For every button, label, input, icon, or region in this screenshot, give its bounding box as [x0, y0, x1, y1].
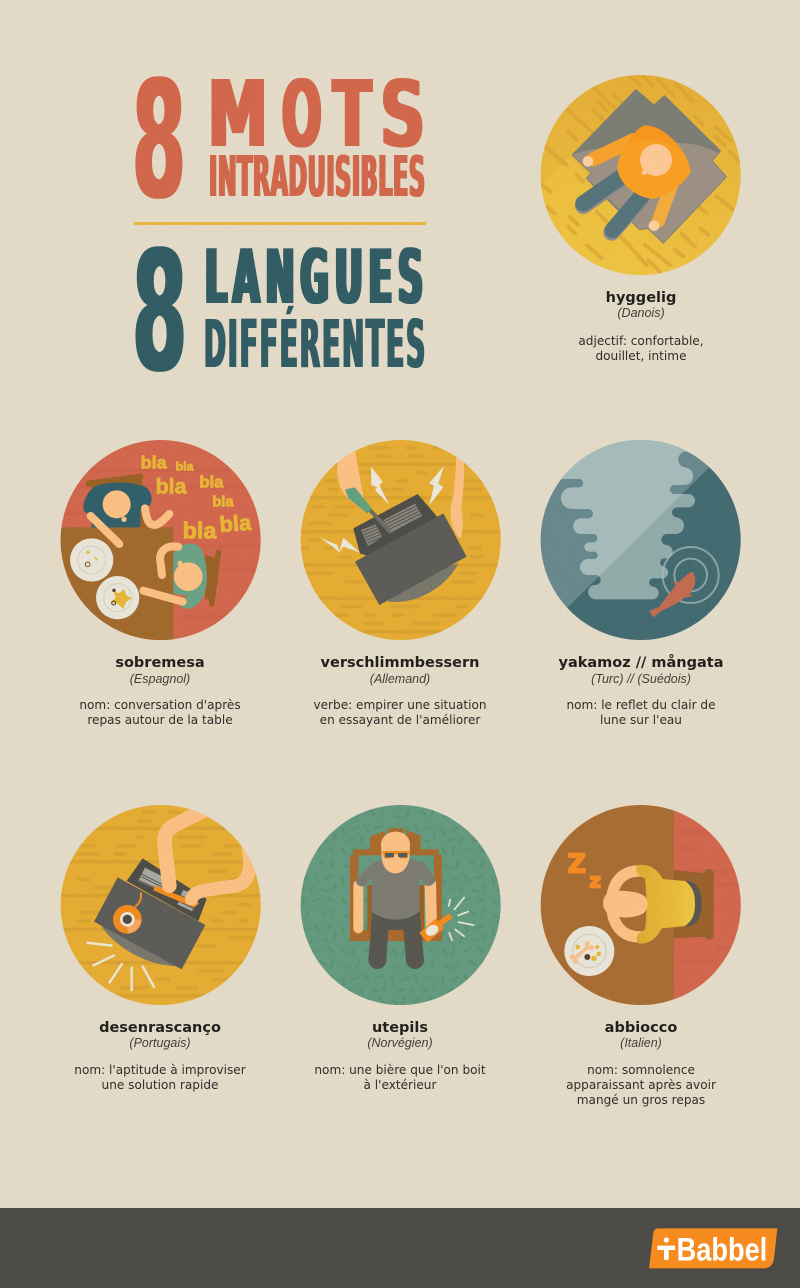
word: utepils: à l'extérieur	[364, 1078, 436, 1092]
logo: Babbel	[649, 1228, 777, 1268]
icon: person sleeping at a table: z	[589, 869, 601, 893]
word: utepils: utepils	[372, 1020, 428, 1036]
word: verschlimmbessern	[313, 655, 487, 727]
heading: 8 langues différentes: LANGUES	[205, 234, 423, 321]
icon: hands fixing a machine with tape	[60, 805, 261, 1005]
word: utepils: nom: une bière que l'on boit	[314, 1063, 486, 1077]
word: yakamoz // mångata: yakamoz // mångata	[559, 654, 723, 671]
word: verschlimmbessern: en essayant de l'améliorer	[320, 713, 480, 727]
icon: people talking at a table: bla	[199, 472, 224, 491]
word: yakamoz // mångata: (Turc) // (Suédois)	[591, 672, 691, 686]
panel: verschlimmbessern	[300, 440, 501, 726]
icon: man with a beer in a deck chair	[300, 805, 501, 1005]
word: abbiocco: (Italien)	[620, 1036, 662, 1050]
logo: Babbel: Babbel	[677, 1231, 767, 1267]
heading: 8 mots intraduisibles: T	[333, 60, 371, 168]
heading: 8 mots intraduisibles: O	[282, 61, 321, 169]
word: sobremesa: nom: conversation d'après	[79, 698, 241, 712]
panel: utepils	[300, 805, 501, 1089]
footer bar	[0, 1208, 800, 1288]
icon: person sleeping at a table	[540, 805, 741, 1005]
heading: 8 mots intraduisibles	[132, 46, 425, 235]
word: desenrascanço: une solution rapide	[102, 1078, 218, 1092]
word: yakamoz // mångata: nom: le reflet du clair de	[566, 698, 716, 712]
word: yakamoz // mångata	[559, 654, 723, 727]
icon: people talking at a table	[60, 440, 261, 640]
word: abbiocco: abbiocco	[605, 1020, 677, 1036]
icon: people talking at a table: bla	[176, 460, 194, 474]
divider	[134, 222, 426, 225]
heading: 8 langues différentes: 8	[132, 215, 187, 409]
word: hyggelig: adjectif: confortable,	[578, 334, 704, 348]
icon: moon reflection on water with fish	[540, 440, 741, 640]
word: hyggelig	[578, 290, 704, 363]
heading: 8 mots intraduisibles: INTRADUISIBLES	[209, 145, 425, 210]
word: abbiocco: mangé un gros repas	[577, 1093, 705, 1107]
word: hyggelig: (Danois)	[617, 306, 665, 320]
word: sobremesa: repas autour de la table	[87, 713, 233, 727]
word: sobremesa: (Espagnol)	[130, 672, 190, 686]
panel: yakamoz // mångata	[540, 440, 741, 724]
word: sobremesa: sobremesa	[115, 655, 205, 671]
icon: person lying on a rug	[540, 75, 741, 275]
word: abbiocco: nom: somnolence	[587, 1063, 695, 1077]
icon: people talking at a table: bla	[141, 452, 168, 472]
word: abbiocco	[566, 1020, 716, 1107]
panel: abbiocco	[540, 805, 741, 1106]
word: verschlimmbessern: (Allemand)	[370, 672, 430, 686]
word: desenrascanço: desenrascanço	[99, 1020, 221, 1036]
word: desenrascanço	[74, 1020, 246, 1092]
word: desenrascanço: nom: l'aptitude à improviser	[74, 1063, 246, 1077]
heading: 8 mots intraduisibles: M	[208, 62, 268, 169]
word: sobremesa	[79, 655, 241, 727]
icon: person sleeping at a table: Z	[567, 849, 586, 879]
word: yakamoz // mångata: lune sur l'eau	[600, 713, 682, 727]
title block	[132, 46, 426, 409]
word: hyggelig: hyggelig	[606, 290, 676, 306]
icon: people talking at a table: bla	[219, 510, 253, 537]
icon: people talking at a table: bla	[183, 517, 217, 543]
word: abbiocco: apparaissant après avoir	[566, 1078, 716, 1092]
word: verschlimmbessern: verschlimmbessern	[321, 655, 479, 671]
panel: sobremesa	[60, 440, 261, 726]
heading: 8 langues différentes	[132, 215, 425, 409]
icon: people talking at a table: bla	[156, 475, 187, 499]
icon: screwdriver poking a broken machine	[300, 440, 501, 640]
word: hyggelig: douillet, intime	[595, 349, 687, 363]
word: utepils: (Norvégien)	[367, 1036, 433, 1050]
icon: people talking at a table: bla	[212, 495, 234, 511]
heading: 8 mots intraduisibles: S	[380, 61, 425, 168]
word: utepils	[314, 1020, 486, 1092]
panel: desenrascanço	[60, 805, 261, 1092]
word: verschlimmbessern: verbe: empirer une situation	[313, 698, 487, 712]
panel: hyggelig	[540, 75, 741, 362]
heading: 8 mots intraduisibles: 8	[132, 46, 186, 235]
word: desenrascanço: (Portugais)	[129, 1036, 191, 1050]
heading: 8 langues différentes: DIFFÉRENTES	[204, 305, 425, 383]
